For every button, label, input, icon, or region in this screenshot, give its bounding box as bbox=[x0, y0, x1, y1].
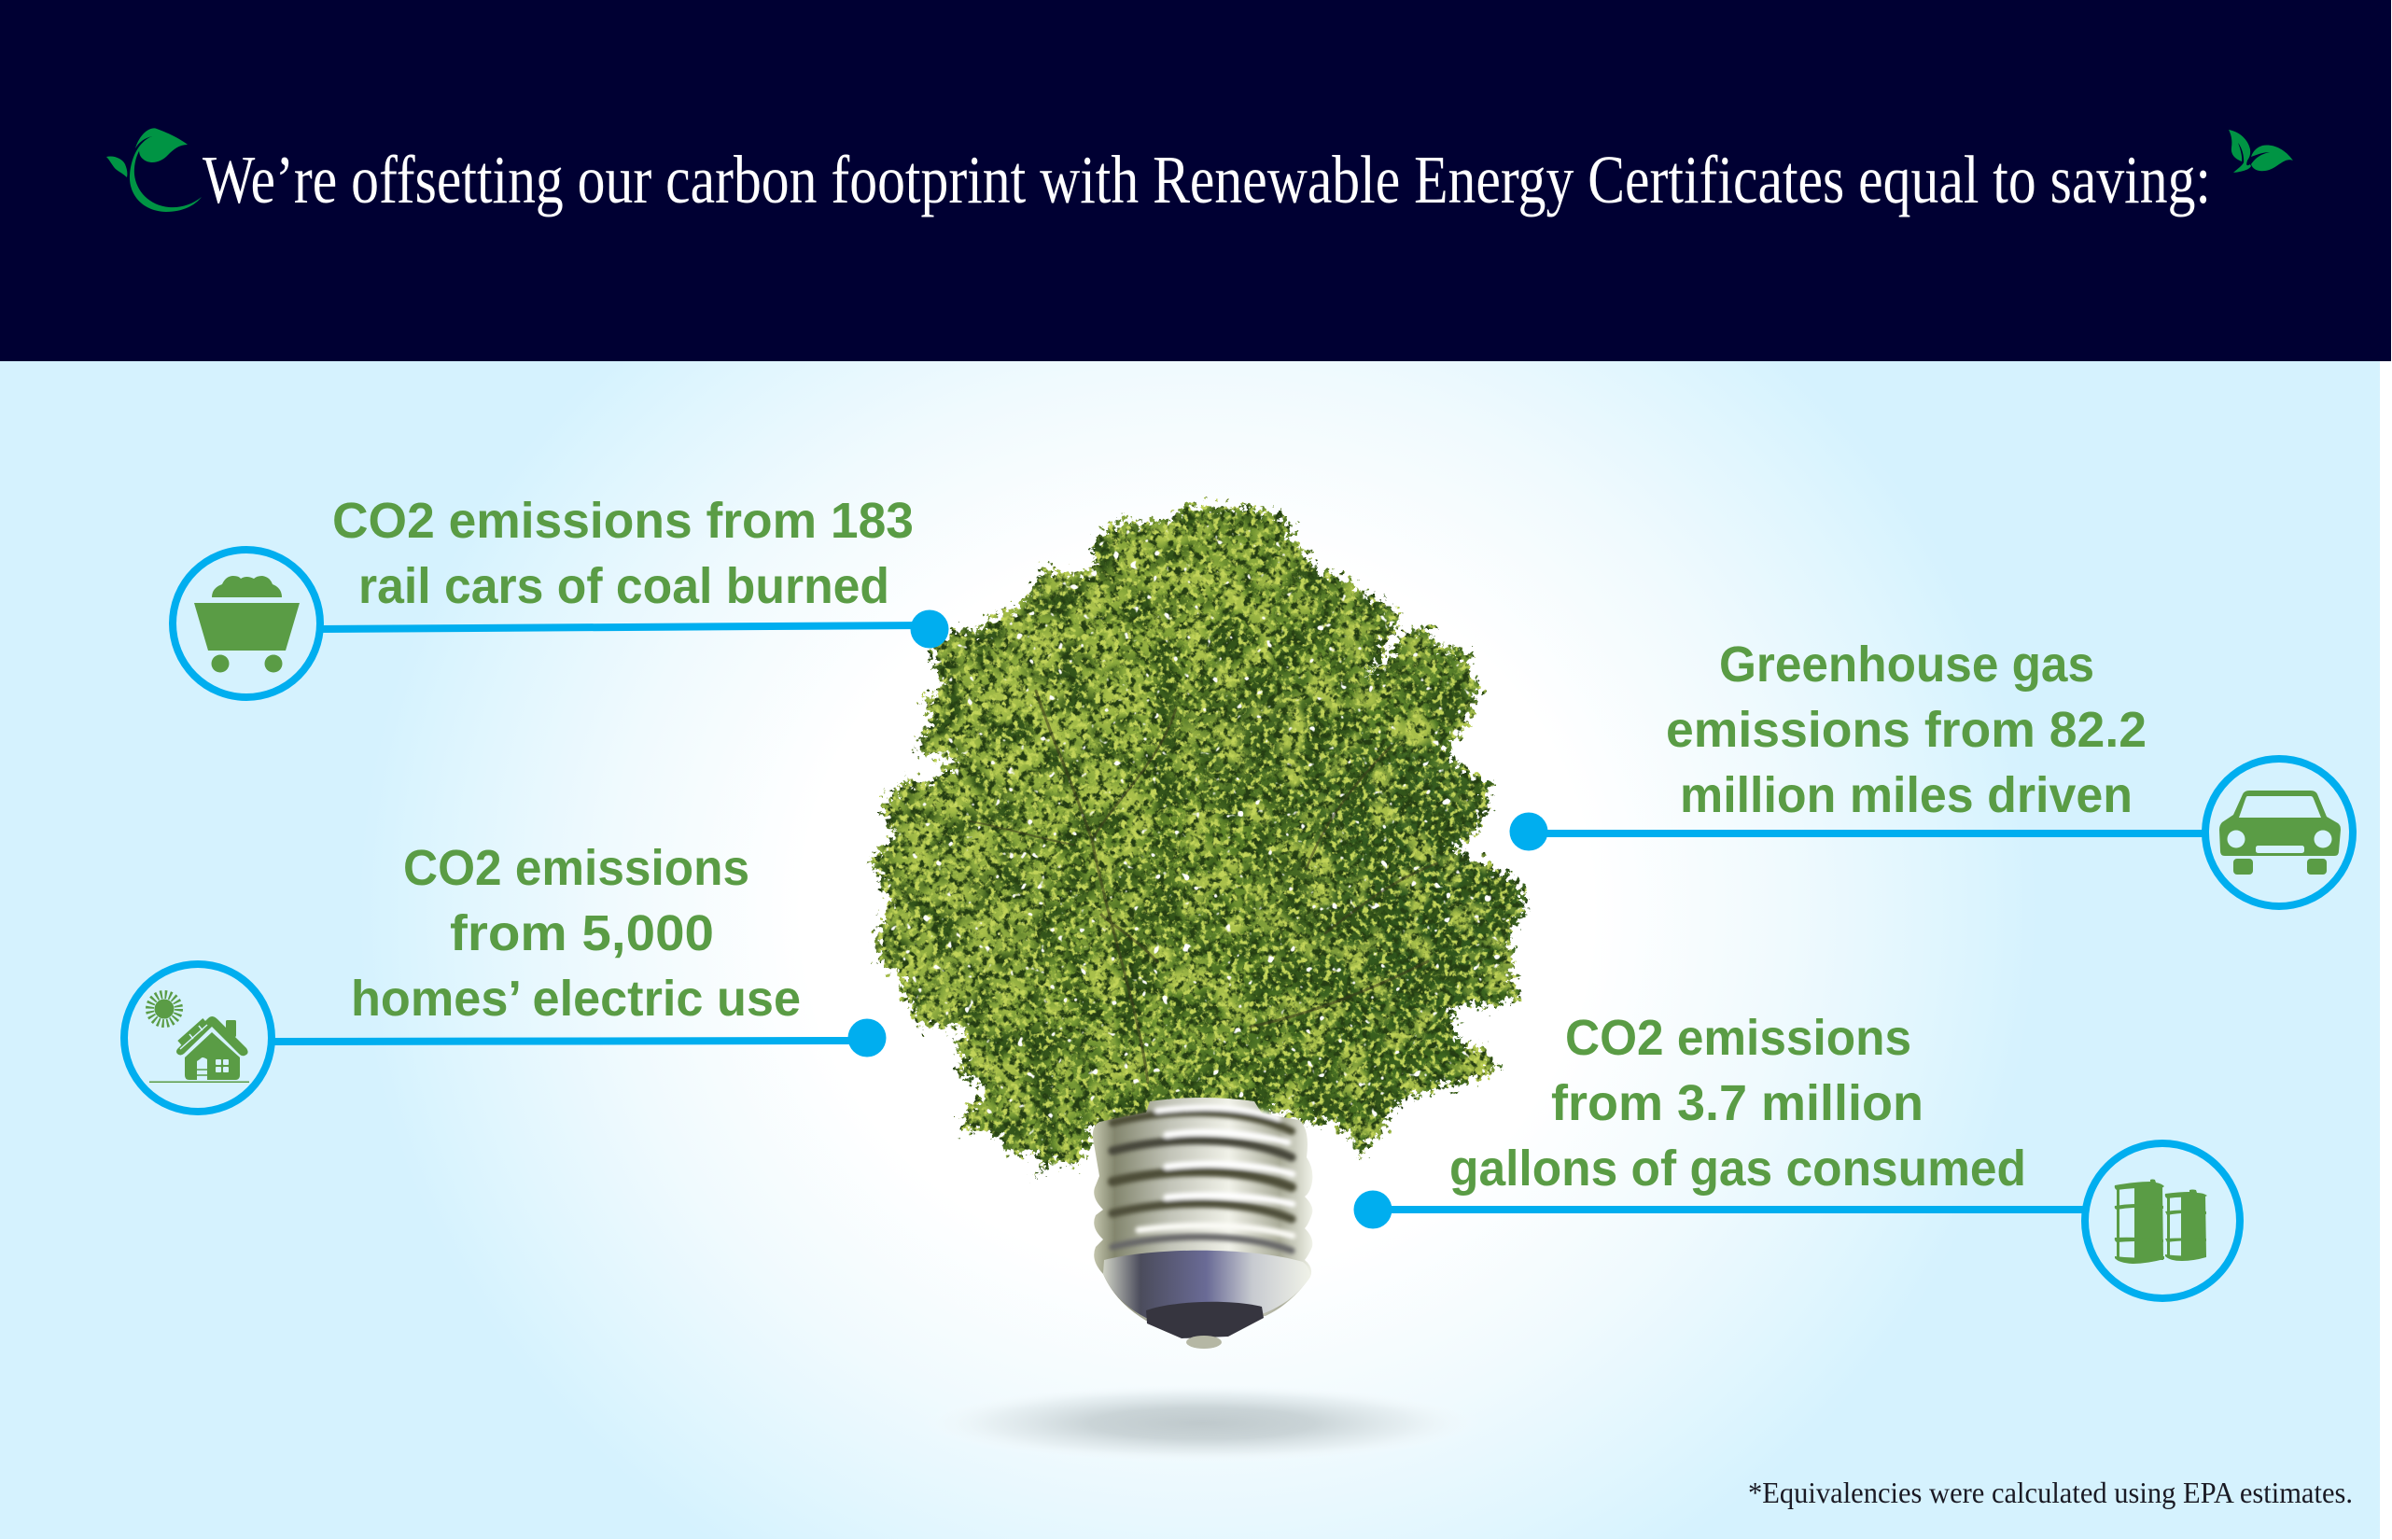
connector line bbox=[271, 1041, 863, 1042]
icon: car in circle bbox=[2205, 759, 2353, 906]
callout: gallons of gas bbox=[1353, 1010, 2240, 1298]
connector dot bbox=[1510, 812, 1547, 851]
text: coal: rail cars of coal burned bbox=[358, 558, 889, 614]
connector line bbox=[1531, 830, 2207, 837]
text: miles driven: emissions from 82.2 bbox=[1666, 702, 2147, 758]
shadow under bulb bbox=[922, 1384, 1482, 1463]
icon: left leaf sprout with crescent stem bbox=[106, 128, 202, 212]
text: homes: from 5,000 bbox=[450, 905, 714, 961]
text: homes: homes’ electric use bbox=[351, 971, 801, 1027]
text: gallons bbox=[1449, 1010, 2026, 1197]
text: gallons: CO2 emissions bbox=[1565, 1010, 1911, 1066]
text: miles driven: million miles driven bbox=[1680, 767, 2133, 823]
callout: homes electric use bbox=[124, 840, 887, 1112]
callout: coal rail cars bbox=[173, 493, 948, 697]
tree foliage bbox=[866, 497, 1531, 1183]
connector dot bbox=[1353, 1191, 1392, 1228]
footnote: *Equivalencies were calculated using EPA estimates. bbox=[1748, 1476, 2353, 1509]
text: coal bbox=[332, 493, 914, 614]
text: gallons: from 3.7 million bbox=[1551, 1075, 1923, 1131]
text: gallons: gallons of gas consumed bbox=[1449, 1141, 2026, 1197]
connector line bbox=[1377, 1206, 2086, 1213]
icon: solar house in circle bbox=[124, 964, 272, 1112]
bulb tip bbox=[1186, 1336, 1222, 1349]
callout: miles driven bbox=[1510, 637, 2353, 906]
light bulb metal base bbox=[1093, 1098, 1312, 1349]
text: miles driven bbox=[1666, 637, 2147, 823]
text: coal: CO2 emissions from 183 bbox=[332, 493, 914, 549]
text: homes bbox=[351, 840, 801, 1027]
icon: right pair of leaves bbox=[2229, 130, 2293, 173]
connector dot bbox=[847, 1019, 887, 1057]
illustration: tree growing from light bulb base bbox=[866, 497, 1531, 1349]
tree branches bbox=[971, 691, 1437, 1083]
icon: coal cart in circle bbox=[173, 550, 320, 697]
connector line bbox=[317, 625, 926, 629]
panel: light blue radial background bbox=[0, 361, 2380, 1539]
bulb dark cap bbox=[1146, 1302, 1264, 1338]
bulb lower cone bbox=[1103, 1251, 1310, 1318]
text: homes: CO2 emissions bbox=[403, 840, 749, 896]
header band bbox=[0, 0, 2391, 361]
icon: barrels in circle bbox=[2085, 1143, 2240, 1298]
connector dot bbox=[911, 610, 948, 648]
text: miles driven: Greenhouse gas bbox=[1719, 637, 2094, 693]
